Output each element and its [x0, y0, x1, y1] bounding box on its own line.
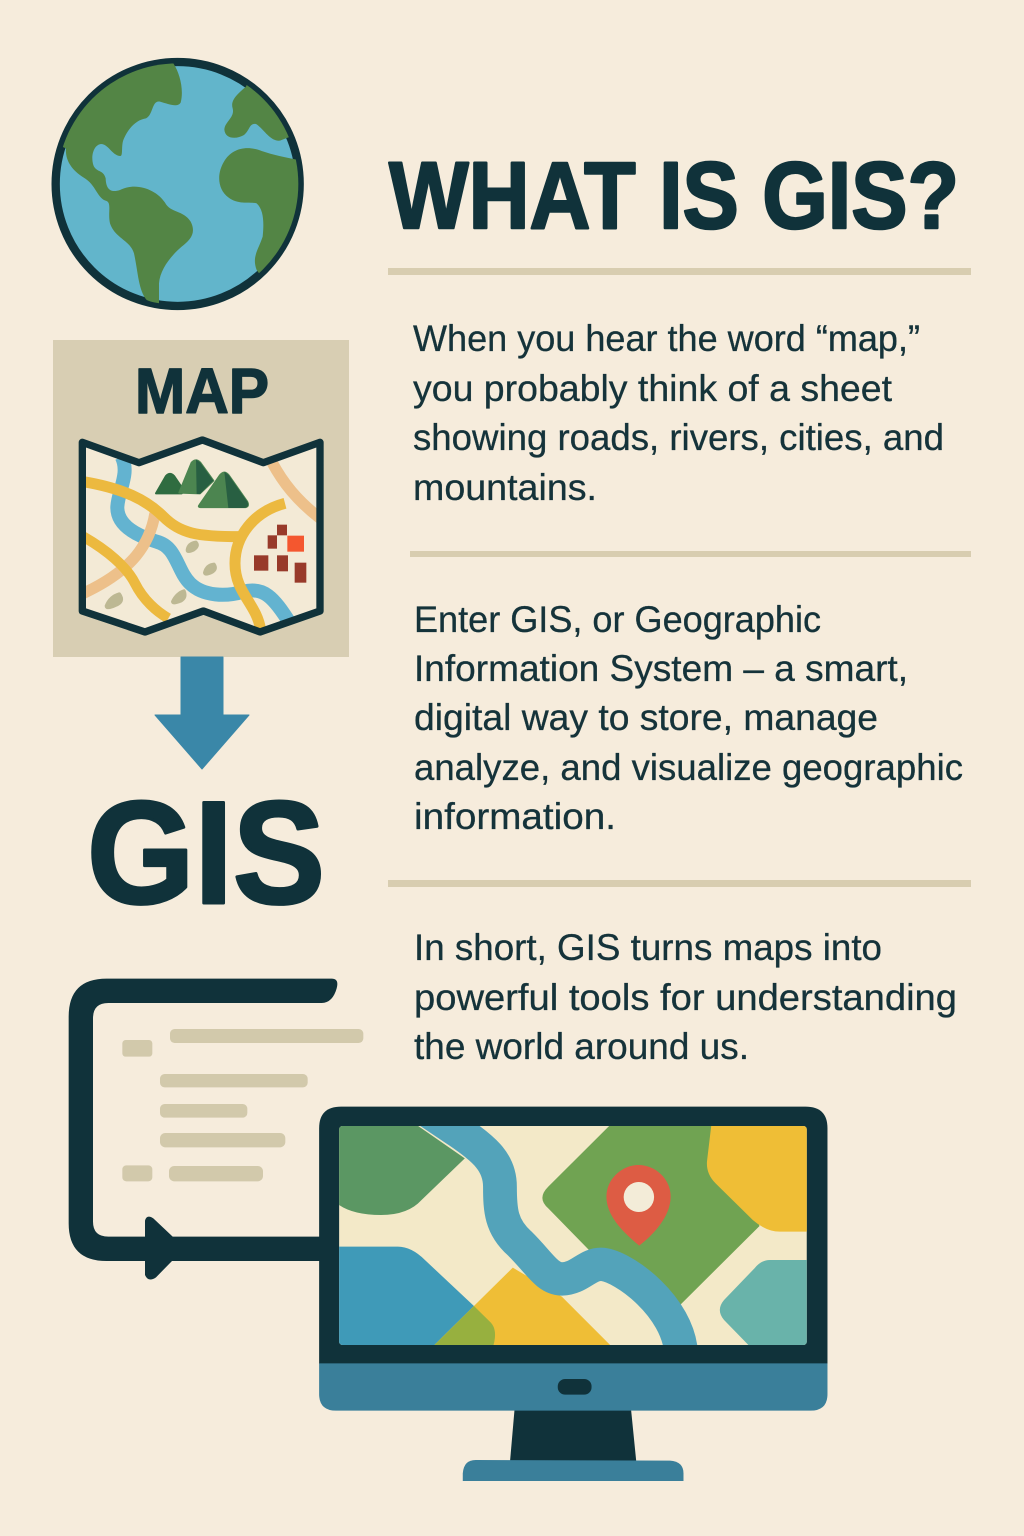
text block: map paragraph: you probably think of a sheet — [413, 368, 893, 409]
text block: summary paragraph: powerful tools for understanding — [414, 977, 957, 1018]
text block: summary paragraph: In short, GIS turns maps into — [414, 927, 882, 968]
text block: map paragraph: showing roads, rivers, cities, and — [413, 417, 944, 458]
map pin — [606, 1165, 671, 1246]
text block: GIS definition paragraph: Enter GIS, or Geographic — [414, 599, 821, 640]
text block: GIS definition paragraph: Information System – a smart, — [414, 648, 908, 689]
panel: map — [53, 340, 349, 657]
document placeholder lines — [122, 1029, 363, 1181]
digital map screen — [339, 1126, 807, 1345]
text block: summary paragraph: the world around us. — [414, 1026, 749, 1067]
text block: summary paragraph — [414, 927, 957, 1067]
monitor chin — [319, 1363, 827, 1411]
icon: globe — [52, 58, 304, 310]
text block: GIS definition paragraph — [414, 599, 963, 837]
text block: GIS definition paragraph: analyze, and visualize geographic — [414, 747, 963, 788]
icon: folded paper map — [82, 440, 320, 632]
text block: GIS definition paragraph: digital way to store, manage — [414, 697, 878, 738]
text block: map paragraph: mountains. — [413, 467, 597, 508]
heading: MAP: MAP — [135, 355, 269, 427]
heading: GIS: GIS — [87, 771, 325, 934]
monitor bezel — [319, 1107, 827, 1363]
icon: document lines with return arrow — [69, 979, 363, 1280]
text block: map paragraph: When you hear the word “map,” — [413, 318, 920, 359]
icon: computer monitor with digital map — [319, 1107, 827, 1481]
monitor stand — [510, 1410, 636, 1461]
arrow: map to GIS — [155, 657, 249, 769]
text block: GIS definition paragraph: information. — [414, 796, 616, 837]
return arrow line — [69, 979, 337, 1280]
text block: map paragraph — [413, 318, 944, 508]
title: WHAT IS GIS? — [389, 143, 959, 249]
